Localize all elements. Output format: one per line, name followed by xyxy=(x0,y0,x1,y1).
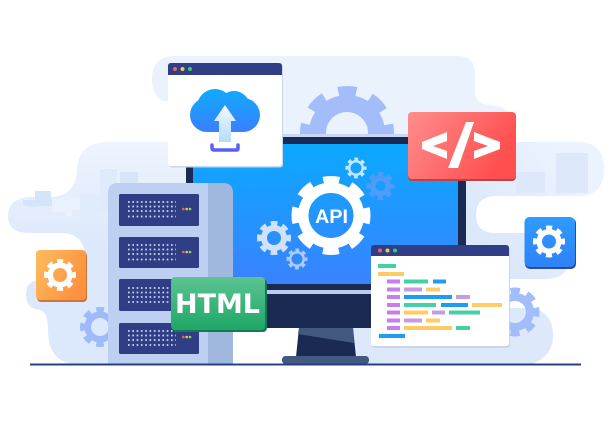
gear: bottom right xyxy=(494,291,536,333)
gear: translucent screen xyxy=(368,174,392,198)
icon: cloud upload xyxy=(190,89,260,150)
HTML label: HTML xyxy=(175,289,260,320)
API label: API xyxy=(315,207,348,228)
server unit 1 xyxy=(119,194,199,226)
orange gear badge xyxy=(36,250,87,302)
gear: bottom left xyxy=(82,310,118,344)
gear: small screen top xyxy=(347,159,365,177)
server unit 4 xyxy=(119,323,199,354)
icon: gear xyxy=(535,228,563,256)
gear: screen lower xyxy=(288,250,306,268)
HTML badge xyxy=(171,277,267,332)
gear: behind monitor xyxy=(305,91,389,175)
server unit 2 xyxy=(119,237,199,268)
monitor top edge xyxy=(187,134,465,137)
icon: code brackets xyxy=(422,122,500,168)
monitor xyxy=(186,134,466,364)
server rack xyxy=(108,183,233,364)
icon: gear xyxy=(46,261,74,289)
monitor screen xyxy=(193,144,458,284)
ground line xyxy=(30,364,581,366)
background blobs xyxy=(8,56,604,364)
code lines xyxy=(378,264,502,338)
upload window xyxy=(168,63,283,168)
code tag badge xyxy=(408,112,516,181)
monitor chin stripe xyxy=(186,290,466,294)
code window xyxy=(371,245,510,348)
server unit 3 xyxy=(119,279,199,311)
monitor stand xyxy=(282,328,369,364)
blue gear badge xyxy=(524,217,576,269)
gear: API xyxy=(295,180,367,251)
gear: screen left xyxy=(260,224,288,252)
monitor frame xyxy=(186,137,466,328)
